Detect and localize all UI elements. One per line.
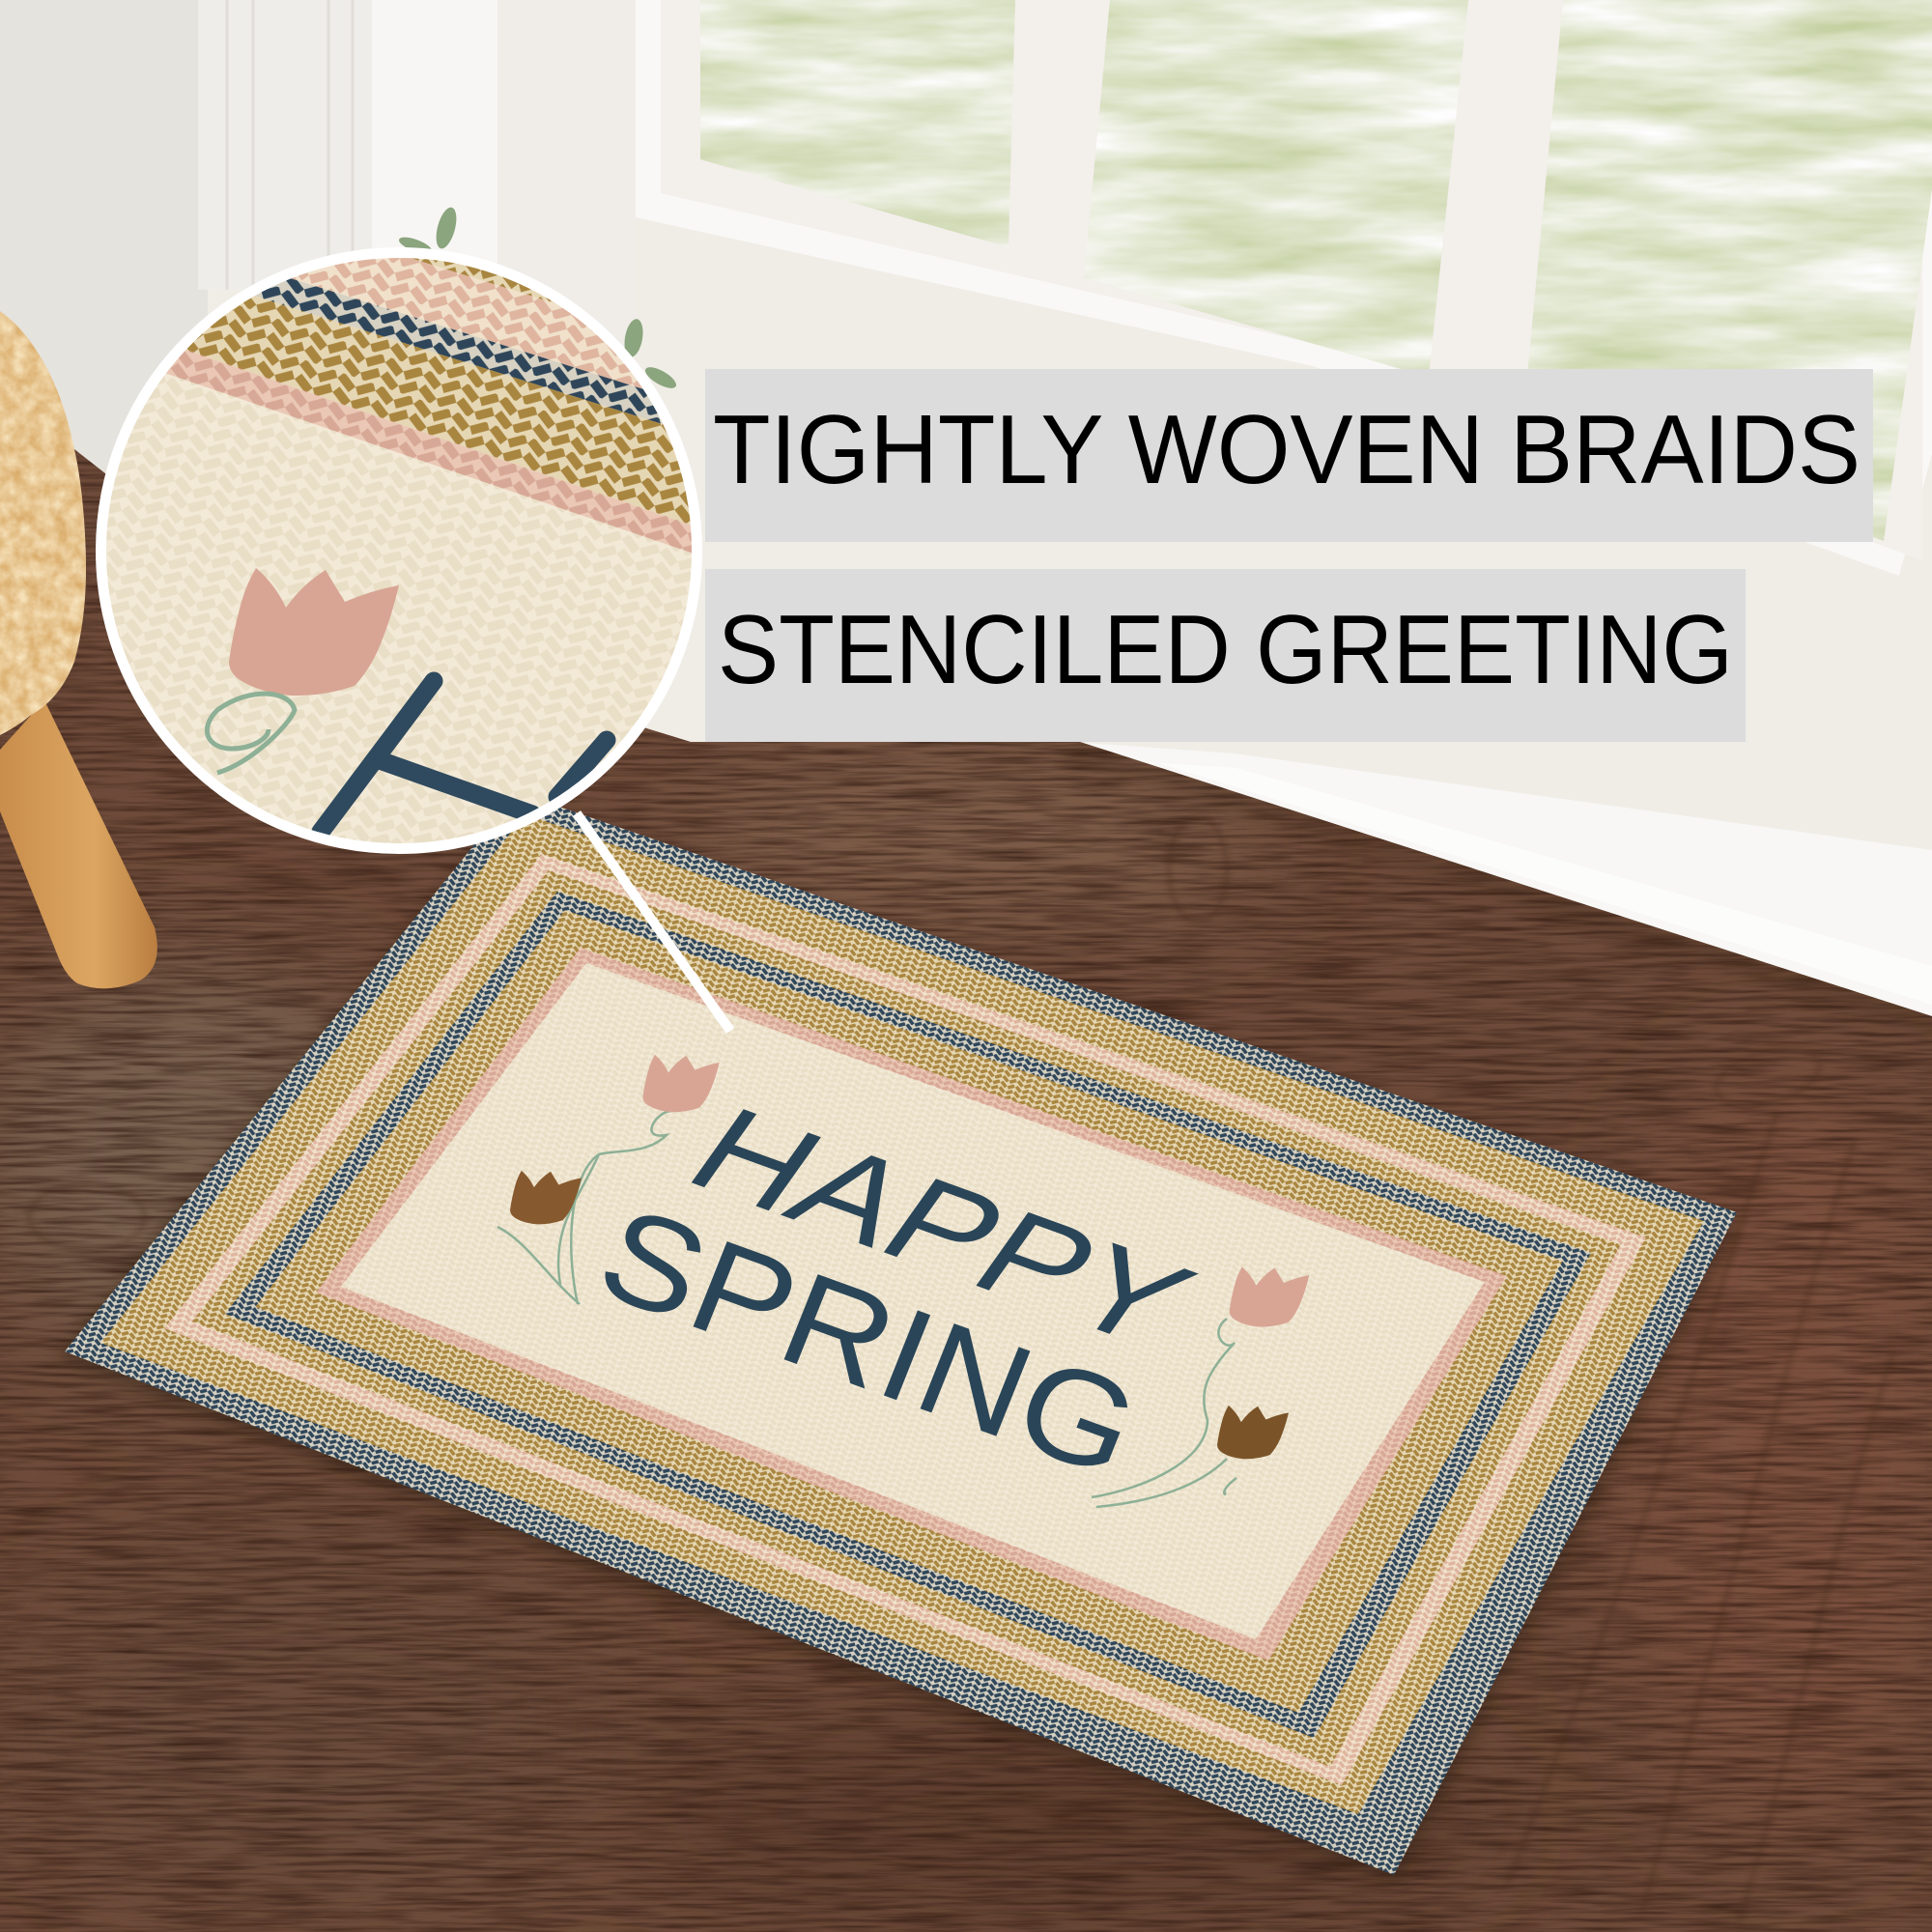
stool leg (0, 700, 157, 988)
close-up: navy band (255, 278, 663, 425)
close-up: tulip stem spiral (207, 694, 295, 773)
rug tulip: brown left (510, 1171, 582, 1224)
callout: tightly woven braids (705, 369, 1873, 542)
rug tulip: brown right (1217, 1406, 1289, 1459)
stool (0, 311, 157, 988)
braided rug (65, 792, 1737, 1875)
rug band: tan (100, 814, 1704, 1814)
rug band: tan inner (192, 870, 1621, 1767)
close-up: letter H (321, 681, 607, 832)
plant leaves behind lens (397, 205, 679, 392)
rug lettering: HAPPY: HAPPY (664, 1083, 1218, 1372)
window panes showing blurred lawn (700, 0, 1932, 541)
rug shadow (56, 800, 1741, 1884)
rug band: outer navy (65, 792, 1737, 1875)
callout: tightly woven braids: TIGHTLY WOVEN BRAIDS (713, 396, 1861, 504)
rug band: inner navy (225, 892, 1591, 1738)
close-up: tan band (186, 296, 691, 526)
close-up: cream field (106, 259, 692, 843)
rug stems (497, 1111, 1236, 1507)
window frame with three panes (636, 0, 1932, 576)
rug band: pink and cream (164, 854, 1646, 1785)
rug band: inner tan (255, 910, 1563, 1713)
window sill (1071, 742, 1932, 1016)
close-up: tulip (229, 568, 399, 696)
close-up: pink cream band (292, 258, 643, 388)
callout: stenciled greeting: STENCILED GREETING (718, 596, 1733, 704)
floor grain arcs (29, 816, 1893, 1922)
rug tulip: pink right (1230, 1267, 1309, 1327)
floor tonal patches (0, 744, 1932, 1913)
lens ring (100, 253, 697, 848)
close-up: top tan band (411, 258, 556, 303)
stool seat (0, 311, 86, 735)
close-up: pink band (166, 350, 692, 553)
rug tulip: pink top left (642, 1055, 720, 1112)
rug centre panel (341, 963, 1485, 1639)
rug band: pink (316, 948, 1507, 1661)
magnifier lens with braid close-up (96, 247, 702, 854)
callout leader line (577, 813, 730, 1031)
callout: stenciled greeting (705, 569, 1746, 742)
rug lettering: SPRING: SPRING (581, 1178, 1158, 1505)
wooden floor (0, 449, 1932, 1932)
